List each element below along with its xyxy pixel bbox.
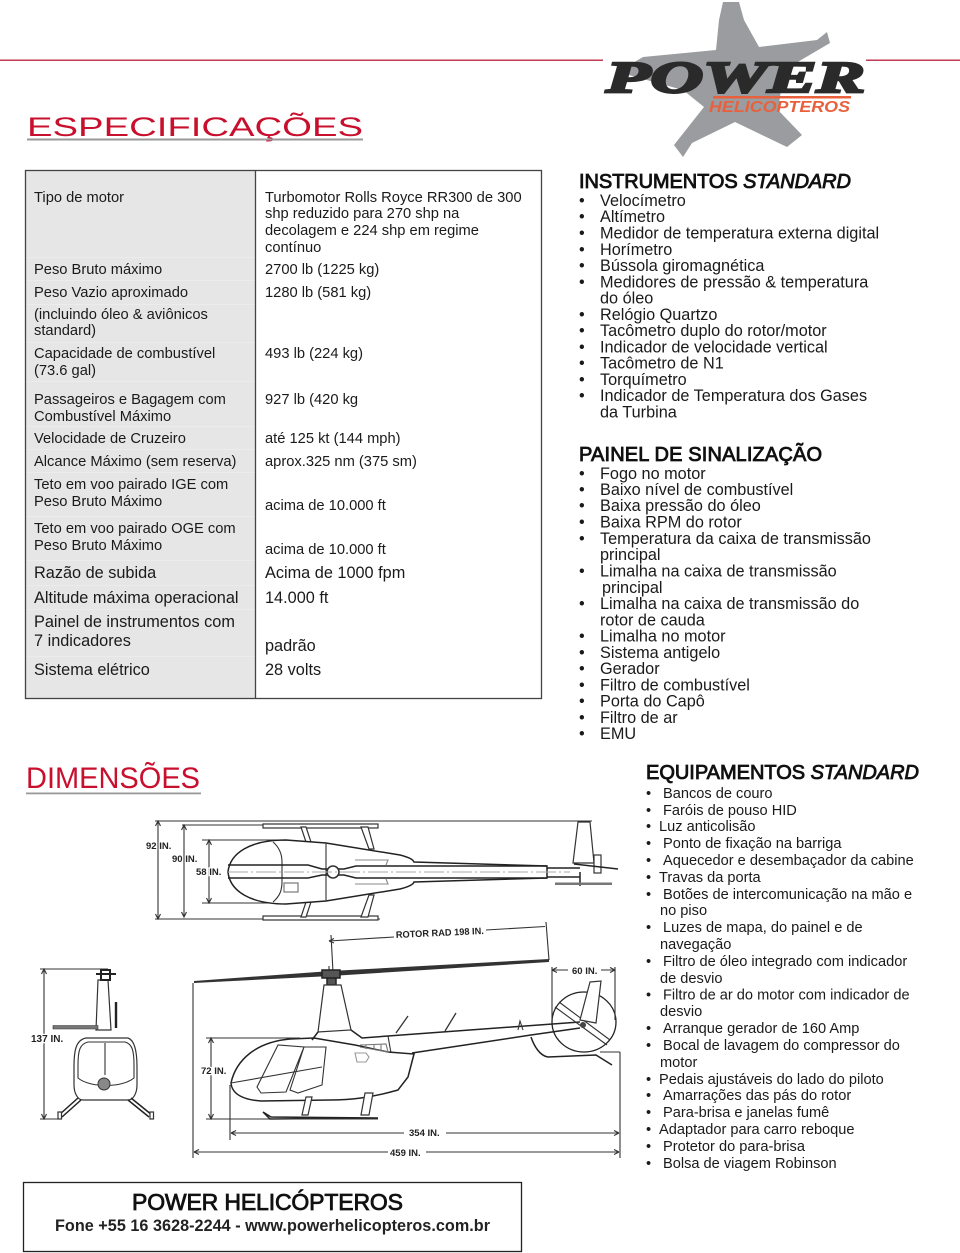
- list: equipamentos standard: •: [646, 1139, 651, 1155]
- table labels column: Tipo de motor: [34, 190, 124, 206]
- table labels column: 7 indicadores: [34, 632, 131, 650]
- list: equipamentos standard: Aquecedor e desembaçador da cabine: [663, 853, 914, 869]
- list: instrumentos standard: do óleo: [600, 290, 653, 308]
- list: painel de sinalização: Baixa RPM do rotor: [600, 514, 742, 532]
- footer contact box: Fone +55 16 3628-2244 - www.powerhelicopteros.com.br: [55, 1217, 491, 1235]
- list: equipamentos standard: desvio: [660, 1004, 702, 1020]
- list: painel de sinalização: •: [579, 595, 585, 613]
- list: equipamentos standard: Bocal de lavagem do compressor do: [663, 1038, 900, 1054]
- list: equipamentos standard: •: [646, 819, 651, 835]
- list: painel de sinalização: •: [579, 628, 585, 646]
- label: 92 in: 92 IN.: [146, 841, 171, 852]
- list: equipamentos standard: Bancos de couro: [663, 786, 773, 802]
- list: equipamentos standard: Filtro de óleo integrado com indicador: [663, 954, 907, 970]
- list: instrumentos standard: •: [579, 208, 585, 226]
- table values column: Turbomotor Rolls Royce RR300 de 300: [265, 190, 522, 206]
- list: equipamentos standard: •: [646, 988, 651, 1004]
- logo: Power Helicópteros star: [604, 2, 865, 157]
- list: instrumentos standard: •: [579, 306, 585, 324]
- list: painel de sinalização: [579, 442, 871, 743]
- list: painel de sinalização: principal: [600, 546, 661, 564]
- diagram: front view helicopter: [31, 969, 154, 1119]
- table labels column: [34, 190, 239, 679]
- table values column: contínuo: [265, 240, 321, 256]
- list: instrumentos standard: Indicador de velocidade vertical: [600, 338, 828, 356]
- table labels column: Capacidade de combustível: [34, 346, 215, 362]
- list: instrumentos standard: Horímetro: [600, 241, 672, 259]
- list: instrumentos standard: Altímetro: [600, 208, 665, 226]
- dimension lines: side view: 60 IN.: [572, 966, 597, 977]
- list: painel de sinalização: Temperatura da caixa de transmissão: [600, 530, 871, 548]
- table values column: shp reduzido para 270 shp na: [265, 206, 460, 222]
- list: painel de sinalização: Gerador: [600, 660, 660, 678]
- list: painel de sinalização: EMU: [600, 725, 636, 743]
- list: equipamentos standard: Luzes de mapa, do painel e de: [663, 920, 863, 936]
- dimension lines: side view: 354 IN.: [409, 1128, 440, 1139]
- table labels column: Peso Bruto máximo: [34, 262, 162, 278]
- heading: especificações: ESPECIFICAÇÕES: [27, 111, 363, 142]
- list: painel de sinalização: Baixa pressão do óleo: [600, 497, 761, 515]
- label: 58 in: 58 IN.: [196, 867, 221, 878]
- table labels column: Razão de subida: [34, 564, 157, 582]
- list: instrumentos standard: Tacômetro de N1: [600, 354, 724, 372]
- list: instrumentos standard: INSTRUMENTOS STANDARD: [579, 171, 851, 193]
- table values column: 927 lb (420 kg: [265, 392, 358, 408]
- table labels column: Velocidade de Cruzeiro: [34, 431, 186, 447]
- list: painel de sinalização: •: [579, 562, 585, 580]
- list: instrumentos standard: •: [579, 241, 585, 259]
- table labels column: (incluindo óleo & aviônicos: [34, 307, 208, 323]
- list: equipamentos standard: navegação: [660, 937, 731, 953]
- table values column: Acima de 1000 fpm: [265, 564, 405, 582]
- list: equipamentos standard: de desvio: [660, 971, 722, 987]
- list: equipamentos standard: •: [646, 786, 651, 802]
- list: equipamentos standard: •: [646, 1072, 651, 1088]
- table values column: decolagem e 224 shp em regime: [265, 223, 479, 239]
- list: equipamentos standard: •: [646, 870, 651, 886]
- list: painel de sinalização: Filtro de ar: [600, 709, 678, 727]
- table values column: 2700 lb (1225 kg): [265, 262, 379, 278]
- list: painel de sinalização: •: [579, 676, 585, 694]
- footer contact box: POWER HELICÓPTEROS: [132, 1189, 403, 1215]
- list: instrumentos standard: Tacômetro duplo do rotor/motor: [600, 322, 827, 340]
- table labels column: Sistema elétrico: [34, 661, 150, 679]
- list: equipamentos standard: •: [646, 1088, 651, 1104]
- diagram: top view helicopter: [155, 821, 618, 920]
- list: instrumentos standard: •: [579, 257, 585, 275]
- list: equipamentos standard: •: [646, 836, 651, 852]
- list: painel de sinalização: •: [579, 481, 585, 499]
- list: painel de sinalização: •: [579, 514, 585, 532]
- header rule: [0, 60, 960, 61]
- list: instrumentos standard: •: [579, 387, 585, 405]
- logo: Power Helicópteros star: POWER: [604, 53, 865, 102]
- list: equipamentos standard: Adaptador para carro reboque: [659, 1122, 855, 1138]
- table values column: padrão: [265, 637, 316, 655]
- dimension lines: side view: 72 IN.: [201, 1066, 226, 1077]
- table labels column: Teto em voo pairado IGE com: [34, 477, 228, 493]
- list: equipamentos standard: Faróis de pouso HID: [663, 803, 797, 819]
- heading: dimensões: DIMENSÕES: [26, 761, 200, 795]
- list: instrumentos standard: da Turbina: [600, 404, 678, 422]
- table values column: acima de 10.000 ft: [265, 498, 386, 514]
- list: painel de sinalização: Sistema antigelo: [600, 644, 720, 662]
- list: instrumentos standard: •: [579, 354, 585, 372]
- list: equipamentos standard: Protetor do para-brisa: [663, 1139, 806, 1155]
- list: instrumentos standard: Torquímetro: [600, 371, 687, 389]
- table values column: 1280 lb (581 kg): [265, 285, 371, 301]
- list: equipamentos standard: •: [646, 803, 651, 819]
- list: instrumentos standard: •: [579, 224, 585, 242]
- list: instrumentos standard: •: [579, 338, 585, 356]
- list: instrumentos standard: Indicador de Temperatura dos Gases: [600, 387, 867, 405]
- list: painel de sinalização: Fogo no motor: [600, 465, 706, 483]
- list: equipamentos standard: •: [646, 853, 651, 869]
- table values column: 14.000 ft: [265, 589, 329, 607]
- table labels column: Teto em voo pairado OGE com: [34, 521, 236, 537]
- table values column: 28 volts: [265, 661, 321, 679]
- table labels column: Passageiros e Bagagem com: [34, 392, 226, 408]
- list: painel de sinalização: Baixo nível de combustível: [600, 481, 793, 499]
- list: equipamentos standard: Arranque gerador de 160 Amp: [663, 1021, 859, 1037]
- table labels column: standard): [34, 323, 96, 339]
- list: equipamentos standard: Travas da porta: [659, 870, 762, 886]
- list: equipamentos standard: Amarrações das pás do rotor: [663, 1088, 851, 1104]
- list: painel de sinalização: Limalha no motor: [600, 628, 726, 646]
- table values column: [265, 190, 522, 679]
- table labels column: Peso Bruto Máximo: [34, 494, 162, 510]
- list: painel de sinalização: •: [579, 465, 585, 483]
- list: painel de sinalização: Filtro de combustível: [600, 676, 750, 694]
- list: painel de sinalização: rotor de cauda: [600, 612, 706, 630]
- list: painel de sinalização: Limalha na caixa de transmissão: [600, 562, 837, 580]
- list: equipamentos standard: [646, 762, 919, 1172]
- list: painel de sinalização: •: [579, 709, 585, 727]
- list: equipamentos standard: Filtro de ar do motor com indicador de: [663, 988, 910, 1004]
- table labels column: Combustível Máximo: [34, 409, 171, 425]
- list: equipamentos standard: •: [646, 1021, 651, 1037]
- list: equipamentos standard: Luz anticolisão: [659, 819, 756, 835]
- footer contact box: [24, 1182, 522, 1252]
- table labels column: Peso Bruto Máximo: [34, 538, 162, 554]
- list: equipamentos standard: motor: [660, 1055, 697, 1071]
- specifications table: [26, 170, 542, 698]
- list: painel de sinalização: PAINEL DE SINALIZAÇÃO: [579, 442, 822, 466]
- list: equipamentos standard: •: [646, 887, 651, 903]
- dimension: rotor radius: [329, 922, 549, 972]
- list: equipamentos standard: Ponto de fixação na barriga: [663, 836, 842, 852]
- list: instrumentos standard: Bússola giromagnética: [600, 257, 765, 275]
- dimension: rotor radius: ROTOR RAD 198 IN.: [396, 926, 484, 941]
- table values column: aprox.325 nm (375 sm): [265, 454, 417, 470]
- list: painel de sinalização: •: [579, 660, 585, 678]
- table values column: 493 lb (224 kg): [265, 346, 363, 362]
- list: painel de sinalização: Limalha na caixa de transmissão do: [600, 595, 859, 613]
- list: instrumentos standard: •: [579, 371, 585, 389]
- list: instrumentos standard: Relógio Quartzo: [600, 306, 717, 324]
- table labels column: Altitude máxima operacional: [34, 589, 239, 607]
- list: painel de sinalização: •: [579, 725, 585, 743]
- dimension lines: side view: 459 IN.: [390, 1148, 421, 1159]
- table labels column: (73.6 gal): [34, 363, 96, 379]
- logo: Power Helicópteros star: HELICOPTEROS: [709, 99, 850, 116]
- list: painel de sinalização: Porta do Capô: [600, 692, 705, 710]
- list: equipamentos standard: •: [646, 954, 651, 970]
- table values column: até 125 kt (144 mph): [265, 431, 401, 447]
- list: equipamentos standard: •: [646, 1105, 651, 1121]
- list: painel de sinalização: •: [579, 530, 585, 548]
- list: instrumentos standard: •: [579, 322, 585, 340]
- list: equipamentos standard: •: [646, 1122, 651, 1138]
- list: equipamentos standard: Pedais ajustáveis do lado do piloto: [659, 1072, 884, 1088]
- list: instrumentos standard: •: [579, 192, 585, 210]
- list: equipamentos standard: EQUIPAMENTOS STANDARD: [646, 762, 919, 784]
- dimension lines: side view: [193, 966, 620, 1159]
- list: instrumentos standard: •: [579, 274, 585, 292]
- list: painel de sinalização: principal: [602, 579, 663, 597]
- list: instrumentos standard: Medidores de pressão & temperatura: [600, 274, 869, 292]
- table labels column: Alcance Máximo (sem reserva): [34, 454, 236, 470]
- table labels column: Painel de instrumentos com: [34, 613, 235, 631]
- table values column: acima de 10.000 ft: [265, 542, 386, 558]
- diagram: front view helicopter: 137 IN.: [31, 1034, 63, 1045]
- list: equipamentos standard: •: [646, 1038, 651, 1054]
- diagram: side view helicopter: [194, 959, 616, 1119]
- list: equipamentos standard: Para-brisa e janelas fumê: [663, 1105, 829, 1121]
- label: 90 in: 90 IN.: [172, 854, 197, 865]
- list: equipamentos standard: Botões de intercomunicação na mão e: [663, 887, 912, 903]
- list: equipamentos standard: •: [646, 1156, 651, 1172]
- list: instrumentos standard: [579, 171, 879, 422]
- list: painel de sinalização: •: [579, 497, 585, 515]
- list: equipamentos standard: •: [646, 920, 651, 936]
- list: painel de sinalização: •: [579, 644, 585, 662]
- list: painel de sinalização: •: [579, 692, 585, 710]
- list: equipamentos standard: Bolsa de viagem Robinson: [663, 1156, 837, 1172]
- list: equipamentos standard: no piso: [660, 903, 707, 919]
- table labels column: Peso Vazio aproximado: [34, 285, 188, 301]
- list: instrumentos standard: Velocímetro: [600, 192, 686, 210]
- list: instrumentos standard: Medidor de temperatura externa digital: [600, 224, 879, 242]
